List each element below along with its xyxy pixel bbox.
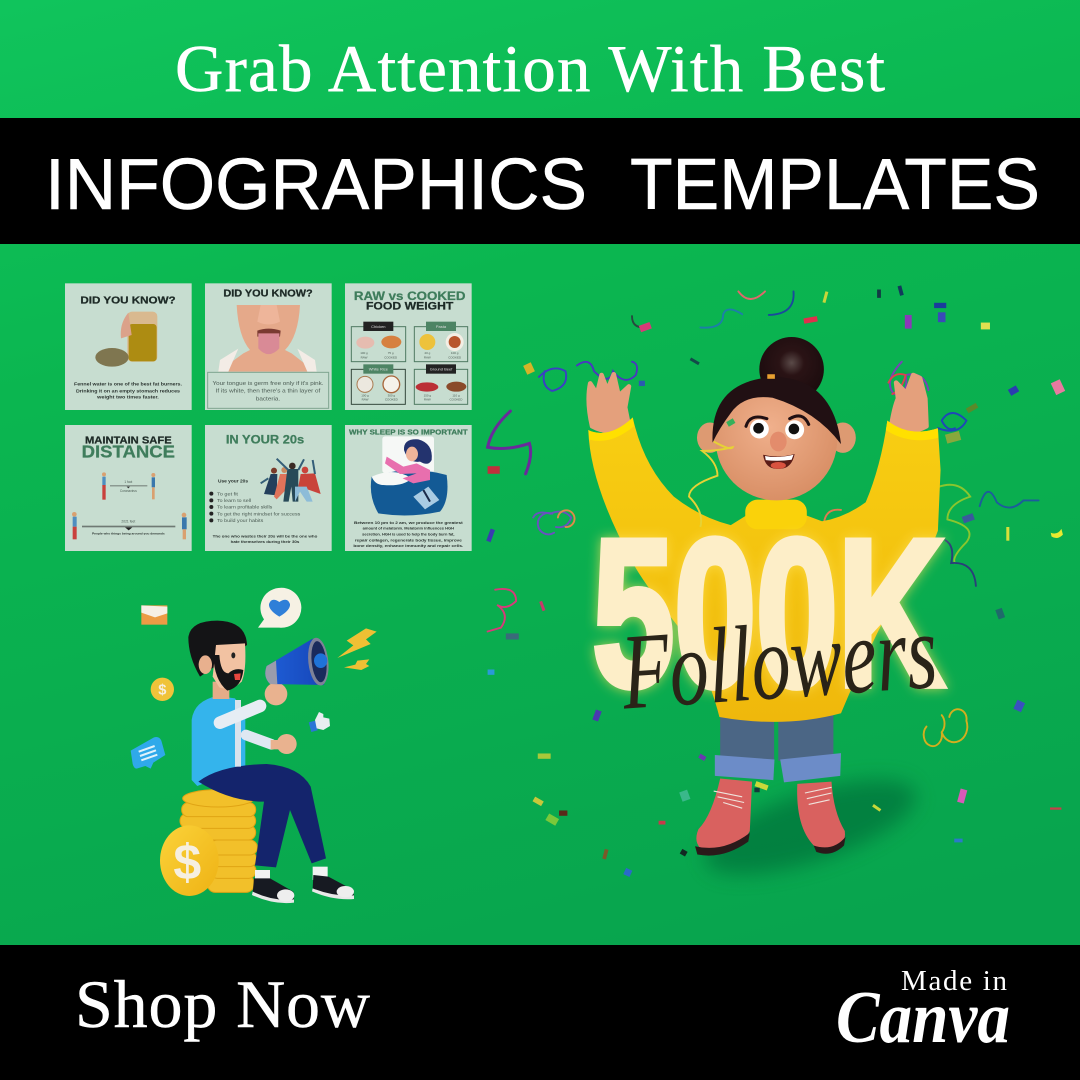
icon: envelope [141, 605, 167, 625]
thumbnail: in your 20s: To get the right mindset for success [217, 511, 301, 516]
thumbnail: fennel water: DID YOU KNOW? [80, 295, 176, 306]
thumbnail: tongue [205, 283, 332, 410]
title: Infographics Templates: TEMPLATES [630, 145, 1040, 225]
thumbnail: in your 20s: To get fit [217, 491, 239, 496]
title: Infographics Templates: INFOGRAPHICS [45, 145, 587, 225]
thumbnail: in your 20s: The one who wastes their 20s will be the one who [213, 533, 318, 538]
thumbnail: raw vs cooked: COOKED [450, 397, 463, 401]
illustration: celebrating character with 500K followers [486, 285, 1065, 894]
megaphone [265, 637, 331, 687]
thumbnail: why sleep: WHY SLEEP IS SO IMPORTANT [349, 428, 468, 437]
legs and cuffs [715, 713, 841, 782]
thumbnail: safe distance: Coronavirus [120, 489, 137, 493]
thumbnail: raw vs cooked: White Rice [369, 366, 389, 371]
thumbnail: tongue: bacteria. [256, 397, 281, 403]
thumbnail: fennel water: weight two times faster. [96, 395, 160, 401]
thumbnail: raw vs cooked: RAW [362, 397, 369, 401]
thumbnail: raw vs cooked: COOKED [385, 397, 399, 401]
thumbnail: why sleep: amount of melatonin. Melatonin influences HGH [363, 526, 454, 531]
thumbnail: fennel water [65, 283, 192, 410]
thumbnail: in your 20s: To learn to sell [217, 498, 251, 503]
thumbnail: raw vs cooked: RAW [361, 355, 368, 359]
icon: thumbs up [309, 712, 330, 732]
thumbnail: in your 20s: To build your habits [217, 518, 264, 523]
thumbnail: safe distance: 2021 feet [121, 519, 135, 523]
thumbnail: why sleep: secretion. HGH is used to help the body burn fat, [362, 531, 454, 536]
arms and hands [220, 683, 297, 767]
thumbnail: raw vs cooked: COOKED [384, 355, 398, 359]
thumbnail: in your 20s: To learn profitable skills [217, 505, 273, 510]
thumbnail: raw vs cooked: 100 g [451, 351, 459, 355]
template thumbnail grid [65, 283, 472, 551]
heading: Grab Attention With Best: Grab Attention With Best [175, 32, 885, 106]
logo: Canva: Canva [836, 977, 1010, 1059]
title: Infographics Templates [45, 145, 1040, 225]
thumbnail: raw vs cooked: 300 g [388, 393, 395, 397]
thumbnail: raw vs cooked: 75 g [388, 351, 394, 355]
thumbnail: raw vs cooked: COOKED [448, 355, 462, 359]
thumbnail: safe distance: 1 foot [124, 480, 132, 484]
head [689, 337, 856, 527]
thumbnail: raw vs cooked: 100 g [360, 351, 368, 355]
thumbnail: fennel water: Fennel water is one of the best fat burners. [74, 382, 183, 388]
thumbnail: raw vs cooked: FOOD WEIGHT [366, 301, 454, 313]
icon: dollar coin: $ [158, 683, 166, 699]
thumbnail: in your 20s [205, 425, 332, 551]
thumbnail: safe distance: DISTANCE [82, 442, 175, 462]
label: Made in: Made in [901, 965, 1008, 997]
icon: lightning bolts [337, 628, 377, 670]
big number: 500K: 500K [592, 497, 944, 730]
thumbnail: safe distance: MAINTAIN SAFE [85, 435, 172, 446]
coin stack [160, 790, 257, 896]
script: Followers: Followers [617, 591, 941, 733]
icon: chat bubble [131, 737, 165, 769]
thumbnail: safe distance: People who things being around you demands [92, 531, 165, 535]
icon: heart speech bubble [258, 588, 301, 628]
shoes [252, 867, 354, 903]
shirt [192, 696, 245, 786]
thumbnail: in your 20s: Use your 20s [218, 478, 248, 484]
thumbnail: raw vs cooked: 100 g [361, 393, 369, 397]
icon: dollar coin [151, 678, 174, 701]
thumbnail: raw vs cooked: 150 g [424, 393, 431, 397]
thumbnail: tongue: Your tongue is germ free only if it's pink. [212, 381, 324, 387]
yellow sweater [588, 418, 941, 722]
thumbnail: why sleep: Between 10 pm to 2 am, we produce the greatest [354, 520, 463, 525]
trousers [198, 764, 326, 867]
thumbnail: raw vs cooked: RAW [424, 355, 431, 359]
thumbnail: raw vs cooked: RAW vs COOKED [354, 289, 466, 303]
thumbnail: in your 20s: IN YOUR 20s [226, 432, 304, 446]
thumbnail: raw vs cooked: Pasta [436, 324, 447, 329]
call to action: Shop Now: Shop Now [75, 966, 370, 1042]
black footer bar [0, 945, 1080, 1080]
thumbnail: why sleep: repair collagen, regenerate body tissue, improve [355, 537, 463, 542]
thumbnail: raw vs cooked: Chicken [371, 324, 386, 329]
thumbnail: raw vs cooked: 40 g [424, 351, 431, 355]
thumbnail: raw vs cooked: Ground Beef [430, 366, 453, 371]
black title banner [0, 118, 1080, 244]
thumbnail: in your 20s: hate themselves during their 30s [231, 539, 300, 544]
thumbnail: raw vs cooked: 110 g [452, 393, 460, 397]
thumbnail: raw vs cooked: RAW [424, 397, 431, 401]
thumbnail: fennel water: Drinking it on an empty stomach reduces [76, 388, 180, 394]
thumbnail: raw vs cooked [345, 283, 472, 410]
illustration: man with megaphone on coins [131, 588, 377, 903]
ground shadow [695, 761, 926, 894]
thumbnail: tongue: If its white, then there's a thin layer of [216, 389, 321, 395]
thumbnail: why sleep [345, 425, 472, 551]
boots [695, 779, 846, 856]
coin stack: $ [173, 834, 201, 890]
confetti [486, 285, 1065, 877]
thumbnail: why sleep: bone density, enhance immunity and repair cells. [353, 543, 463, 548]
thumbnail: safe distance [65, 425, 192, 551]
head [188, 621, 247, 699]
thumbnail: tongue: DID YOU KNOW? [223, 289, 313, 300]
hands [589, 374, 926, 431]
